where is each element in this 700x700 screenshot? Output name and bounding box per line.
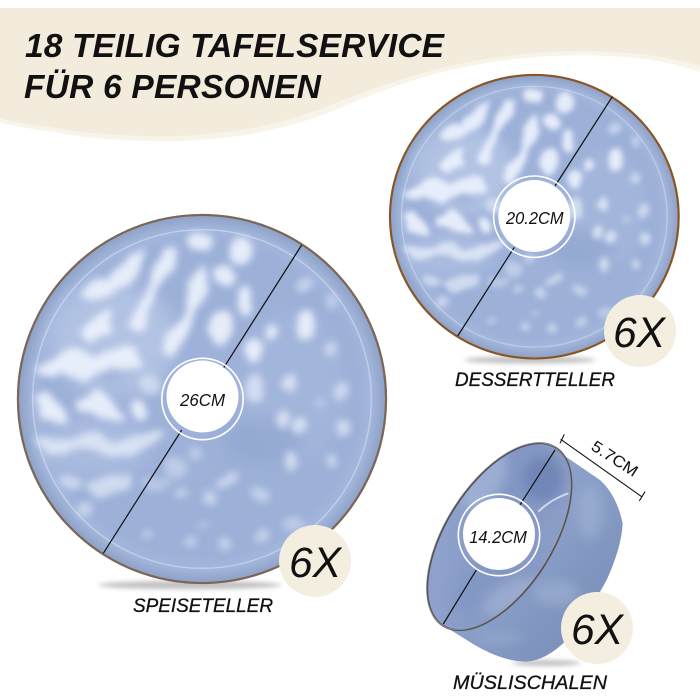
title: 18 TEILIG TAFELSERVICE (25, 28, 446, 65)
quantity badge 6X (561, 592, 633, 664)
diameter badge 20.2cm (494, 176, 575, 257)
quantity badge 6X: 6X (289, 539, 343, 587)
plate shadows (98, 356, 596, 666)
big plate ceramic (18, 215, 386, 583)
panel: Dessertteller dessert plate (390, 75, 679, 367)
bowl outer body (440, 449, 623, 662)
bowl illustration (397, 419, 623, 662)
quantity badge 6X: 6X (613, 309, 667, 357)
header cream wave background (0, 8, 700, 141)
dessert plate ceramic (390, 75, 679, 358)
height dimension 5.7cm: 5.7CM (588, 438, 641, 481)
label Dessertteller: DESSERTTELLER (455, 369, 615, 391)
diameter badge 14.2cm: 14.2CM (469, 527, 527, 547)
title (24, 28, 446, 106)
label Speiseteller: SPEISETELLER (133, 595, 273, 617)
diameter badge 14.2cm (458, 494, 540, 576)
bowl rim (397, 419, 601, 654)
panel: Müslischalen bowl (397, 419, 645, 664)
bowl inner (398, 419, 601, 654)
quantity badge 6X (279, 525, 351, 597)
diameter line 14.2cm (443, 450, 555, 624)
panel: Speiseteller dinner plate (18, 215, 386, 597)
label Müslischalen: MÜSLISCHALEN (453, 672, 608, 694)
diameter line 26cm (103, 245, 302, 553)
title: FÜR 6 PERSONEN (24, 69, 322, 106)
diameter badge 20.2cm: 20.2CM (505, 208, 564, 228)
height dimension 5.7cm (560, 434, 645, 501)
diameter line 20.2cm (458, 97, 612, 336)
quantity badge 6X (604, 295, 676, 367)
diameter badge 26cm: 26CM (179, 390, 225, 410)
diameter badge 26cm (162, 358, 243, 440)
quantity badge 6X: 6X (571, 606, 625, 654)
